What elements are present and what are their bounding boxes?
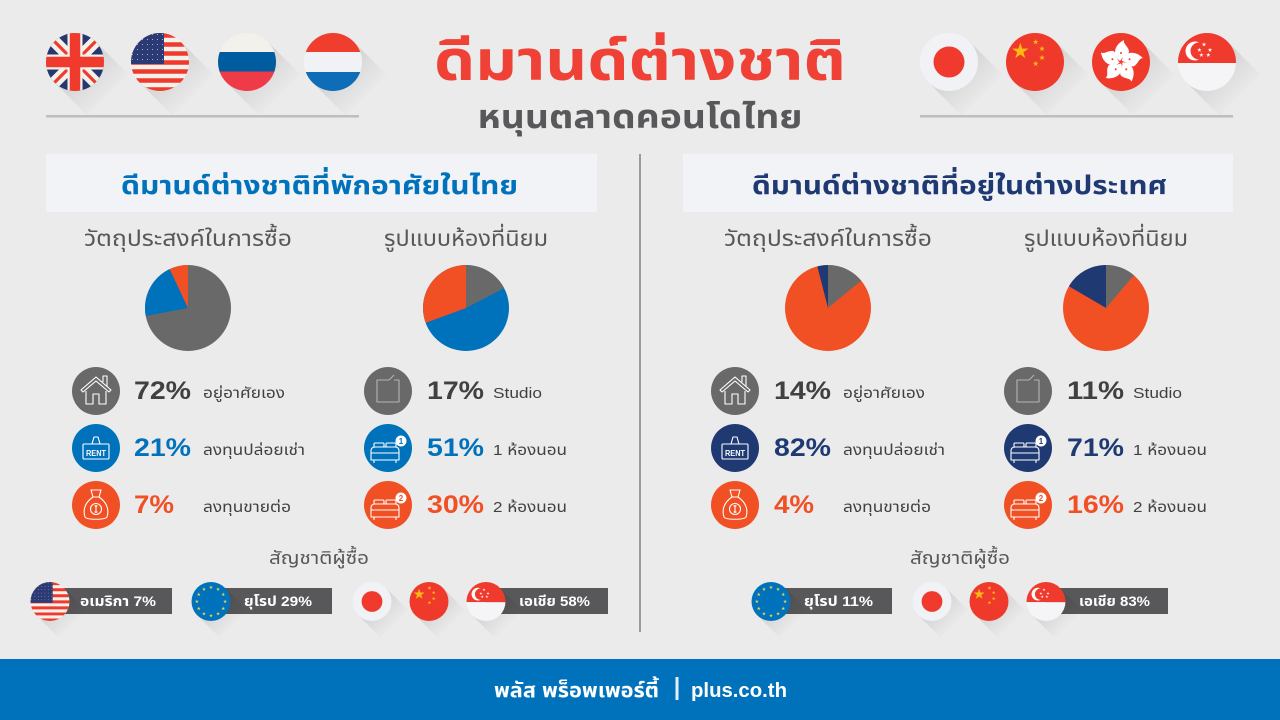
panel: residents in Thailand <box>31 154 608 637</box>
stat: live in 14%: 14% <box>774 377 831 405</box>
stat: 2 bedrooms 30%: 30% <box>427 491 484 519</box>
nationality: Europe 29%: ยุโรป 29% <box>244 593 313 610</box>
pie chart: room type <box>423 265 509 351</box>
stat: studio 11%: Studio <box>1133 385 1182 402</box>
stat: 1 bedroom 51%: 1 <box>399 437 404 446</box>
stat: 1 bedroom 71%: 1 ห้องนอน <box>1133 442 1207 459</box>
nationality: America 7%: อเมริกา 7% <box>80 593 157 609</box>
stat: live in 72%: อยู่อาศัยเอง <box>203 384 285 402</box>
stat: 1 bedroom 51% <box>364 424 567 472</box>
stat: rent 21%: ลงทุนปล่อยเช่า <box>203 441 305 459</box>
nationality: Europe 29% <box>192 582 332 637</box>
stat: resale 4%: ลงทุนขายต่อ <box>843 498 931 516</box>
stat: 1 bedroom 51%: 1 ห้องนอน <box>493 442 567 459</box>
nationality label: สัญชาติผู้ซื้อ <box>269 545 369 570</box>
stat: studio 17%: 17% <box>427 377 484 405</box>
nationality: Europe 11% <box>752 582 892 637</box>
subtitle: หนุนตลาดคอนโดไทย <box>478 98 802 137</box>
nationality: America 7% <box>31 582 172 637</box>
stat: 2 bedrooms 16%: 2 <box>1039 494 1044 503</box>
stat: 2 bedrooms 16% <box>1004 481 1207 529</box>
stat: rent 82%: ลงทุนปล่อยเช่า <box>843 441 945 459</box>
stat: rent 82%: 82% <box>774 434 831 462</box>
divider <box>639 154 641 632</box>
subheading: purpose: วัตถุประสงค์ในการซื้อ <box>724 223 932 252</box>
heading: overseas buyers: ดีมานด์ต่างชาติที่อยู่ในต่างประเทศ <box>752 167 1167 201</box>
pie chart: purpose <box>785 265 871 351</box>
heading: residents in Thailand: ดีมานด์ต่างชาติที่พักอาศัยในไทย <box>121 167 518 200</box>
stat: 1 bedroom 71%: 71% <box>1067 434 1124 462</box>
stat: live in 14%: อยู่อาศัยเอง <box>843 384 925 402</box>
heading: residents in Thailand <box>46 154 597 212</box>
stat: rent 82%: RENT <box>725 449 745 458</box>
stat: rent 82% <box>711 424 945 472</box>
stat: resale 7%: ลงทุนขายต่อ <box>203 498 291 516</box>
stat: rent 21%: RENT <box>86 449 106 458</box>
pie chart: room type <box>1063 265 1149 351</box>
stat: 1 bedroom 71%: 1 <box>1039 437 1044 446</box>
subheading: purpose: วัตถุประสงค์ในการซื้อ <box>84 223 292 252</box>
nationality: Europe 11%: ยุโรป 11% <box>804 593 874 610</box>
title: ดีมานด์ต่างชาติ <box>434 29 846 92</box>
stat: live in 14% <box>711 367 925 415</box>
flags: asian countries <box>920 33 1260 118</box>
subheading: room type: รูปแบบห้องที่นิยม <box>1024 223 1188 252</box>
stat: live in 72% <box>72 367 285 415</box>
stat: resale 4%: 4% <box>774 491 814 519</box>
nationality label: สัญชาติผู้ซื้อ <box>910 545 1010 570</box>
stat: 2 bedrooms 16%: 2 ห้องนอน <box>1133 499 1207 516</box>
stat: 2 bedrooms 30% <box>364 481 567 529</box>
stat: studio 17% <box>364 367 542 415</box>
stat: resale 7%: 7% <box>134 491 174 519</box>
stat: 2 bedrooms 30%: 2 <box>399 494 404 503</box>
stat: 1 bedroom 71% <box>1004 424 1207 472</box>
footer: พลัส พร็อพเพอร์ตี้ <box>494 676 660 702</box>
stat: studio 11%: 11% <box>1067 377 1124 405</box>
nationality: Asia 83%: เอเชีย 83% <box>1079 593 1151 609</box>
stat: studio 11% <box>1004 367 1182 415</box>
heading: overseas buyers <box>683 154 1233 212</box>
stat: 1 bedroom 51%: 51% <box>427 434 484 462</box>
subheading: room type: รูปแบบห้องที่นิยม <box>384 223 548 252</box>
stat: rent 21% <box>72 424 305 472</box>
stat: resale 7% <box>72 481 291 529</box>
panel: overseas buyers <box>683 154 1233 637</box>
flags: western countries <box>46 33 386 118</box>
nationality: Asia 58%: เอเชีย 58% <box>519 593 591 609</box>
pie chart: purpose <box>145 265 231 351</box>
stat: resale 4% <box>711 481 931 529</box>
stat: 2 bedrooms 16%: 16% <box>1067 491 1124 519</box>
nationality: Asia 58% <box>353 582 608 637</box>
nationality: Asia 83% <box>913 582 1168 637</box>
footer: plus.co.th <box>691 680 787 702</box>
footer <box>0 659 1280 720</box>
stat: studio 17%: Studio <box>493 385 542 402</box>
stat: 2 bedrooms 30%: 2 ห้องนอน <box>493 499 567 516</box>
stat: rent 21%: 21% <box>134 434 191 462</box>
stat: live in 72%: 72% <box>134 377 191 405</box>
